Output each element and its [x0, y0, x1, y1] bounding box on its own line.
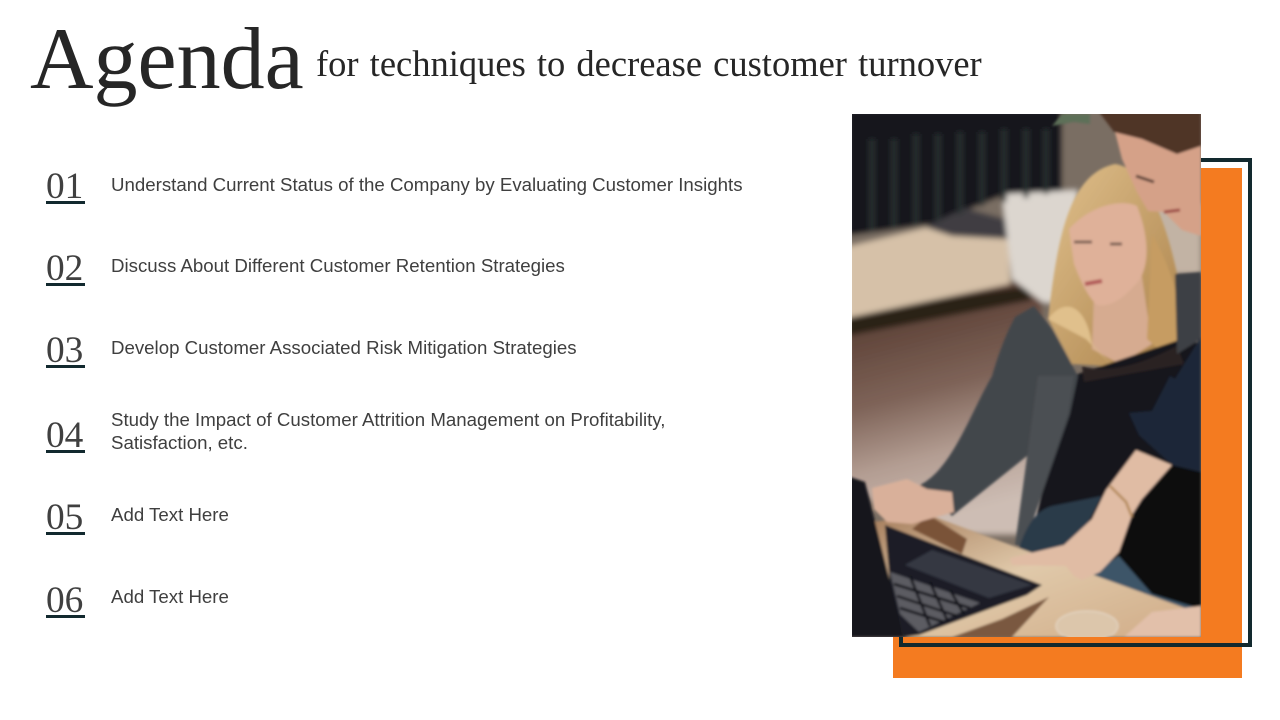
item 04 text	[111, 409, 665, 453]
orange backing panel	[893, 168, 1242, 678]
radiator ribs	[872, 129, 1046, 232]
laptop screen	[850, 477, 904, 637]
item 03 text: Develop Customer Associated Risk Mitigation Strategies	[111, 337, 577, 358]
neck	[1092, 264, 1152, 364]
standing woman arm and hand	[1010, 450, 1172, 580]
standing woman body	[1117, 465, 1201, 609]
plant	[1052, 114, 1090, 126]
number 06: 06	[46, 580, 83, 621]
photo: two women at a laptop	[852, 114, 1201, 637]
laptop base	[885, 525, 1042, 637]
number 03: 03	[46, 330, 83, 371]
blonde woman face	[1069, 203, 1147, 305]
number 04: 04	[46, 415, 83, 456]
lace neckline	[1082, 346, 1184, 382]
number 05: 05	[46, 497, 83, 538]
item 04 text: Study the Impact of Customer Attrition Management on Profitability,	[111, 409, 665, 430]
jacket right	[1175, 272, 1201, 354]
left hand	[872, 479, 954, 524]
dark outline frame	[899, 158, 1252, 647]
background	[847, 109, 1207, 644]
item 02 text: Discuss About Different Customer Retention Strategies	[111, 255, 565, 276]
table	[872, 515, 1201, 637]
jacket and arm	[920, 306, 1078, 546]
title word: Agenda: Agenda	[30, 11, 304, 108]
item 06 text: Add Text Here	[111, 586, 229, 607]
item 05 text: Add Text Here	[111, 504, 229, 525]
keyboard	[890, 572, 980, 632]
number 02: 02	[46, 248, 83, 289]
subtitle: for techniques to decrease customer turnover	[316, 43, 982, 84]
palm rest	[905, 550, 1032, 598]
title	[30, 11, 982, 108]
jeans	[1014, 496, 1102, 559]
number 01: 01	[46, 166, 83, 207]
glass on table	[1056, 611, 1118, 641]
standing woman face	[1114, 126, 1201, 236]
lower right hand	[1124, 606, 1201, 637]
item 01 text: Understand Current Status of the Company by Evaluating Customer Insights	[111, 174, 743, 195]
torso	[1032, 339, 1201, 614]
standing woman sleeve	[1129, 337, 1201, 472]
blonde woman hair	[1048, 164, 1188, 369]
item 04 text: Satisfaction, etc.	[111, 432, 248, 453]
